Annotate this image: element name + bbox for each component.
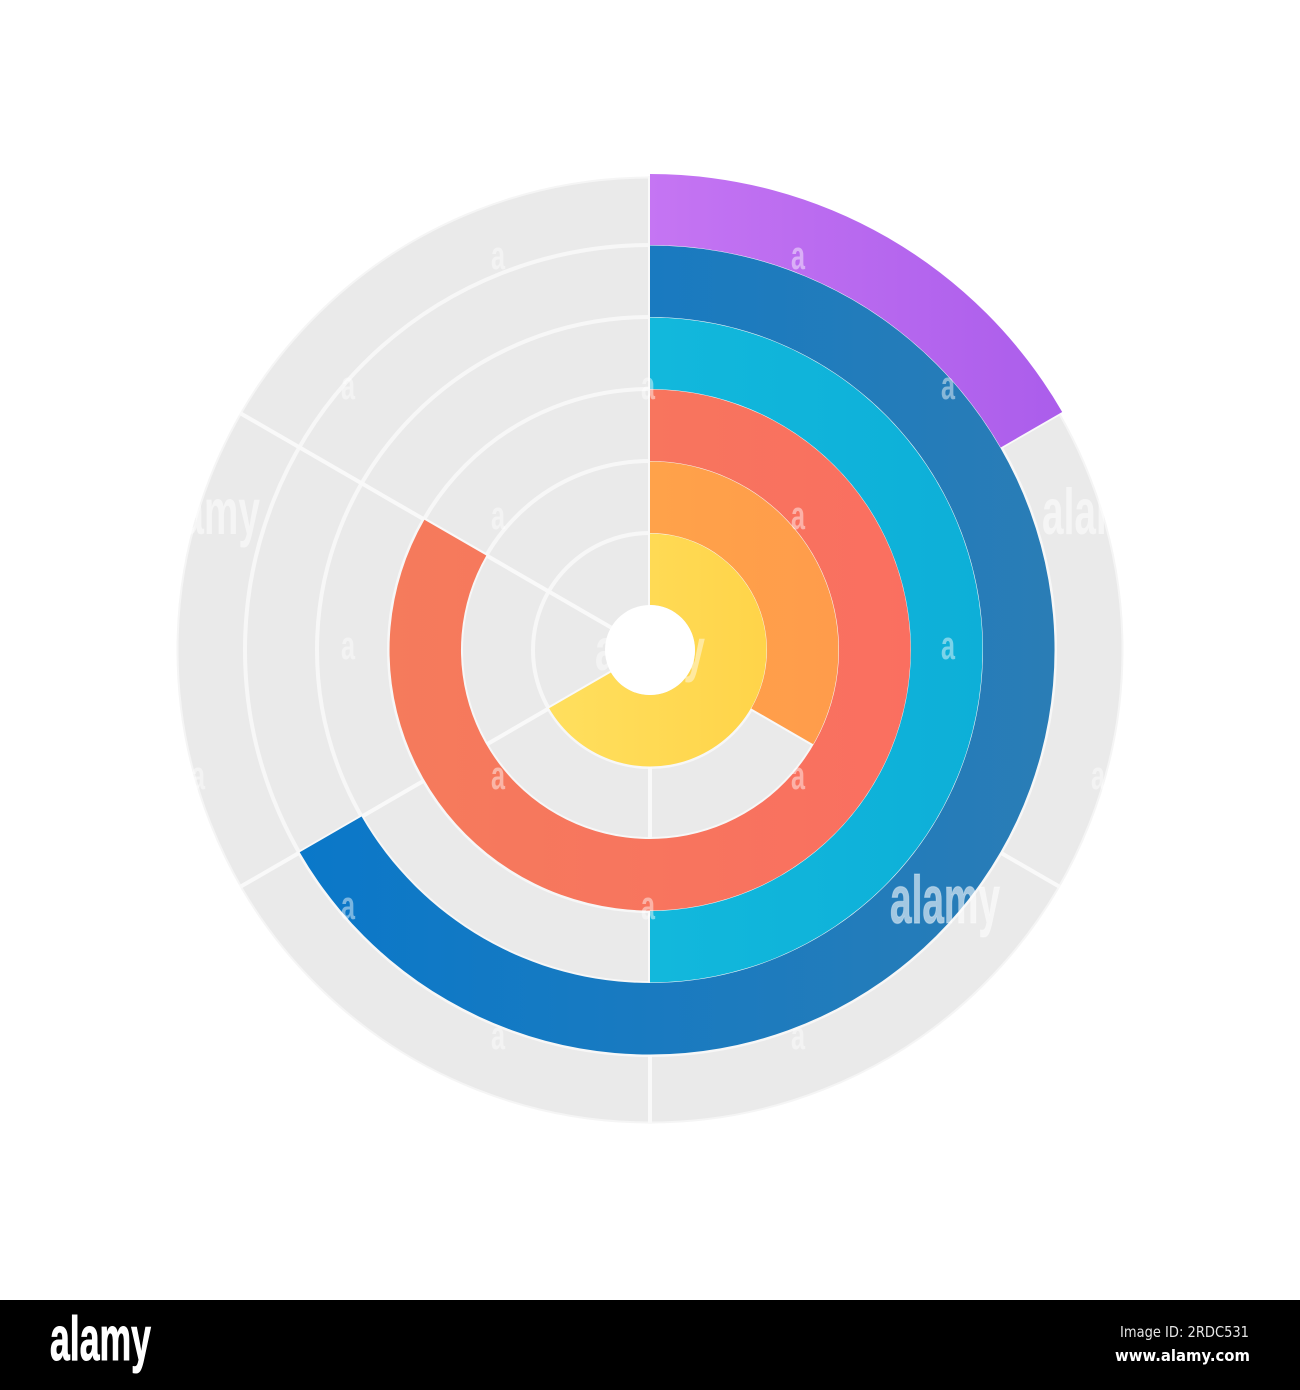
watermark fragments: a — [941, 624, 955, 668]
watermark fragments: a — [191, 754, 205, 798]
footer logo: alamy — [50, 1304, 151, 1373]
watermark fragments: a — [491, 234, 505, 278]
image id: Image ID: 2RDC531 — [1120, 1323, 1249, 1341]
watermark edge words: alamy — [1042, 477, 1152, 549]
footer bar — [0, 1300, 1300, 1390]
ring 2: orange segment — [650, 462, 838, 744]
watermark fragments: a — [791, 234, 805, 278]
center hole — [605, 605, 695, 695]
watermark fragments: a — [791, 1014, 805, 1058]
ring 1: yellow segment — [549, 534, 767, 766]
background track disc with ring and spoke lines — [178, 176, 1122, 1124]
center watermark word: alamy — [595, 617, 705, 683]
watermark fragments: a — [341, 364, 355, 408]
watermark edge words — [150, 477, 1152, 549]
watermark fragments: a — [491, 754, 505, 798]
ring 5: blue segment — [300, 246, 1055, 1054]
watermark fragments: a — [941, 364, 955, 408]
watermark edge words: alamy — [150, 477, 260, 549]
ring 3: coral segment — [390, 389, 911, 911]
watermark fragments: a — [641, 884, 655, 928]
watermark fragments: a — [641, 364, 655, 408]
watermark fragments — [191, 234, 1105, 1058]
large watermark word: alamy — [890, 861, 1000, 938]
radial chart — [178, 174, 1122, 1124]
ring 4: cyan segment — [650, 318, 983, 982]
watermark fragments: a — [791, 494, 805, 538]
watermark fragments: a — [341, 884, 355, 928]
watermark fragments: a — [491, 494, 505, 538]
watermark fragments: a — [341, 624, 355, 668]
watermark fragments: a — [791, 754, 805, 798]
website: www.alamy.com — [1115, 1346, 1250, 1365]
watermark fragments: a — [1091, 754, 1105, 798]
watermark fragments: a — [491, 1014, 505, 1058]
ring 6: purple segment — [650, 174, 1062, 448]
stock watermark — [150, 234, 1152, 1058]
